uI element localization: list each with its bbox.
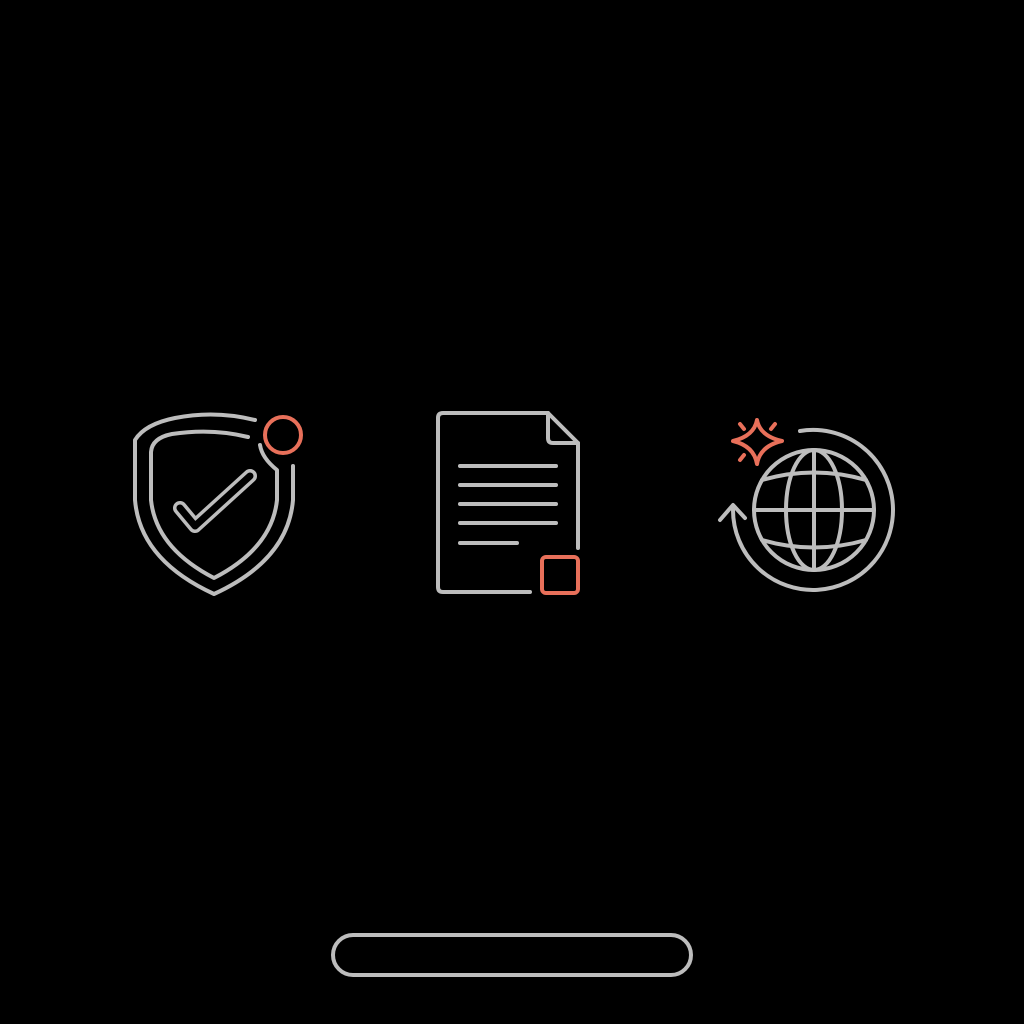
progress bar bbox=[333, 935, 691, 975]
icon: shield with check bbox=[135, 414, 301, 594]
icon: globe with refresh arrow bbox=[720, 420, 893, 590]
sparkle bbox=[733, 420, 782, 464]
badge circle bbox=[265, 417, 301, 453]
icon: document bbox=[438, 413, 578, 593]
orange square bbox=[542, 557, 578, 593]
check mark bbox=[180, 476, 250, 526]
